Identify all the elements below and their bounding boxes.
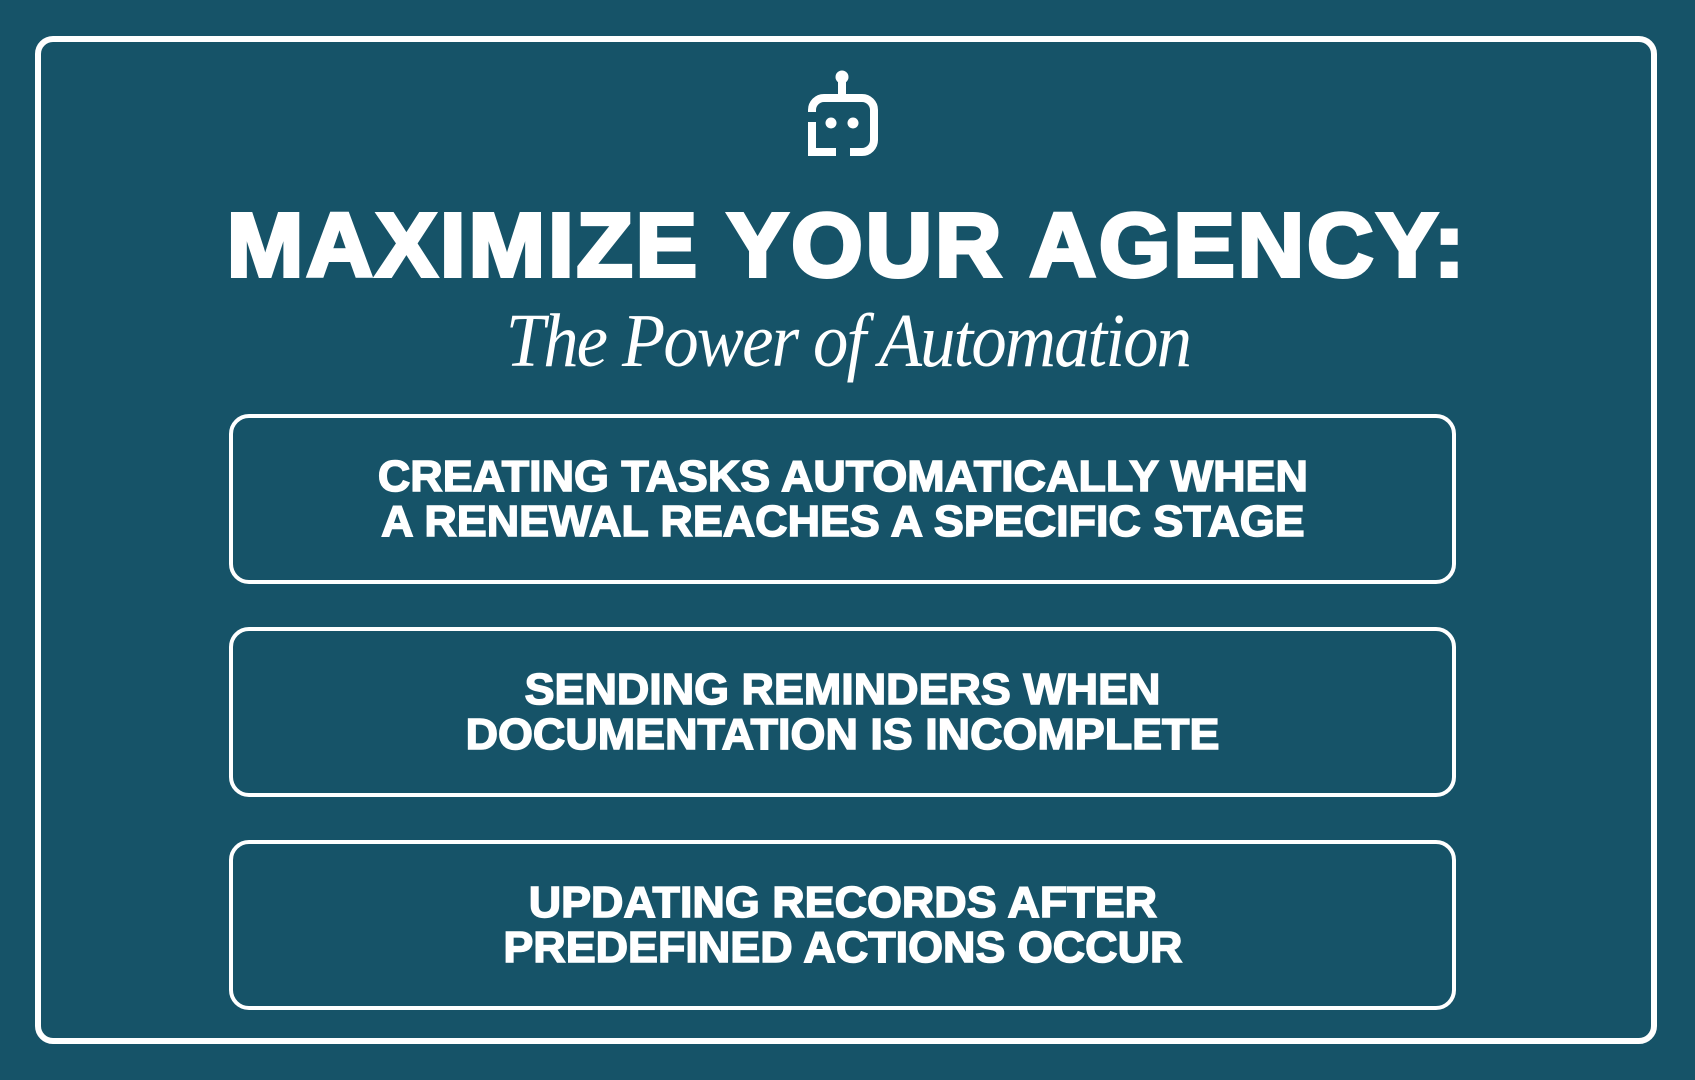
box: updating records bbox=[229, 840, 1456, 1010]
icon: robot bbox=[808, 70, 878, 156]
box: creating tasks: A RENEWAL REACHES A SPECIFIC STAGE bbox=[381, 497, 1304, 546]
box: creating tasks: CREATING TASKS AUTOMATICALLY WHEN bbox=[377, 452, 1308, 501]
subtitle: The Power of Automation bbox=[505, 299, 1190, 383]
box: sending reminders: SENDING REMINDERS WHEN bbox=[525, 665, 1160, 714]
title: MAXIMIZE YOUR AGENCY: bbox=[227, 196, 1468, 296]
box: updating records: UPDATING RECORDS AFTER bbox=[528, 878, 1157, 927]
box: updating records: PREDEFINED ACTIONS OCCUR bbox=[503, 923, 1182, 972]
box: sending reminders: DOCUMENTATION IS INCOMPLETE bbox=[466, 710, 1219, 759]
box: sending reminders bbox=[229, 627, 1456, 797]
box: creating tasks bbox=[229, 414, 1456, 584]
